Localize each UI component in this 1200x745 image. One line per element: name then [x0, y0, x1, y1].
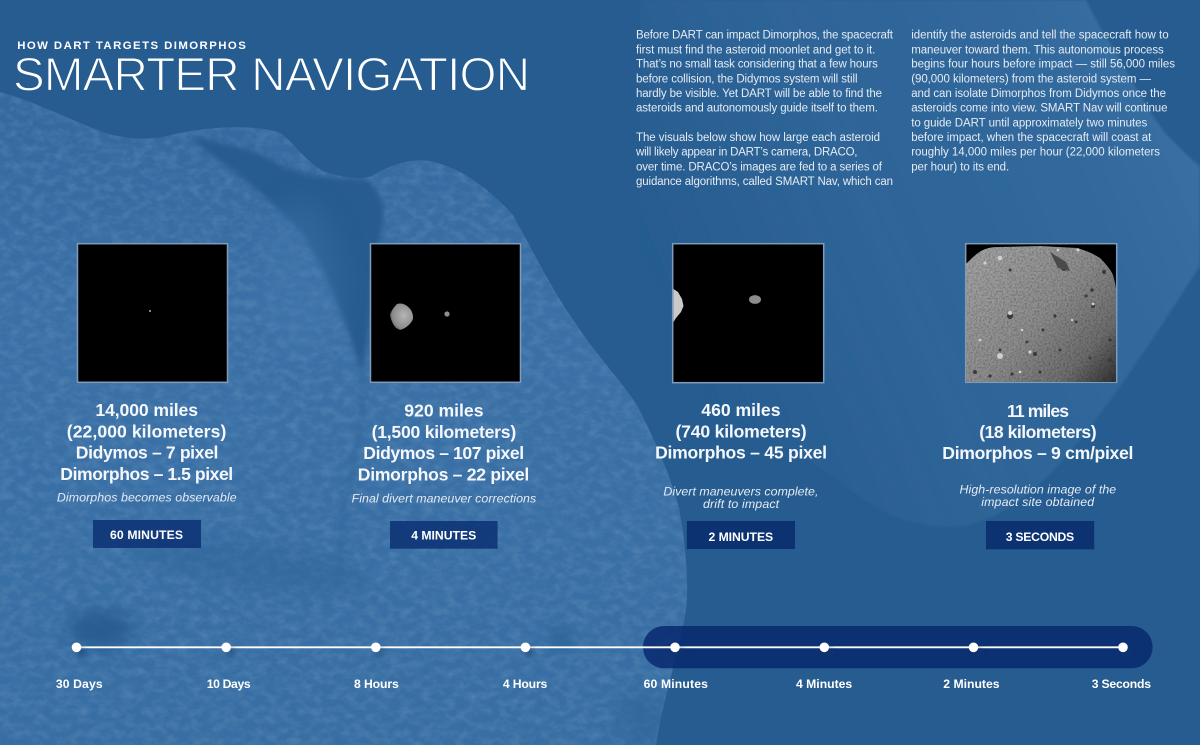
stats: 60 minutes: (22,000 kilometers) [67, 422, 226, 442]
camera image: 60 minutes [78, 244, 228, 382]
stats: 60 minutes: 14,000 miles [95, 400, 198, 420]
intro text column two: (90,000 kilometers) from the asteroid system — [911, 73, 1152, 85]
stats: 60 minutes: Didymos – 7 pixel [76, 442, 218, 462]
stats: 3 seconds: (18 kilometers) [979, 422, 1097, 442]
timeline highlight band [643, 626, 1153, 668]
caption: 2 minutes: Divert maneuvers complete, [663, 484, 818, 498]
stats: 4 minutes: Didymos – 107 pixel [363, 443, 524, 463]
intro text column one: before collision, the Didymos system will still [636, 73, 858, 85]
stats: 2 minutes: (740 kilometers) [676, 422, 807, 442]
timeline labels [56, 677, 1151, 691]
timeline labels: 4 Hours [503, 677, 548, 691]
timeline labels: 8 Hours [354, 677, 399, 691]
camera image: 4 minutes [370, 244, 520, 382]
intro text column two: per hour) to its end. [911, 161, 1009, 173]
intro text column one: will likely appear in DART’s camera, DRACO, [635, 147, 858, 159]
time badge: 3 seconds [986, 521, 1094, 549]
caption: 3 seconds: High-resolution image of the [960, 482, 1116, 496]
timeline markers [72, 642, 1128, 652]
timeline labels: 30 Days [56, 677, 103, 691]
panel: 2 minutes [655, 244, 827, 549]
panel: 3 seconds [942, 244, 1133, 549]
time badge: 4 minutes: 4 MINUTES [411, 528, 476, 542]
stats: 4 minutes: Dimorphos – 22 pixel [358, 465, 529, 485]
stats: 4 minutes [358, 401, 529, 485]
intro text column two: and can isolate Dimorphos from Didymos once the [911, 88, 1166, 100]
caption: 3 seconds [960, 482, 1116, 509]
panel: 4 minutes [352, 244, 536, 549]
timeline labels: 2 Minutes [943, 677, 1000, 691]
intro text column two: identify the asteroids and tell the spacecraft how to [911, 30, 1169, 42]
stats: 2 minutes [655, 400, 827, 462]
caption: 2 minutes: drift to impact [703, 497, 780, 511]
intro text column one: guidance algorithms, called SMART Nav, which can [636, 176, 893, 188]
intro text column two: asteroids come into view. SMART Nav will continue [911, 103, 1168, 115]
intro text column one: That’s no small task considering that a few hours [636, 59, 878, 71]
background: near asteroid [0, 90, 700, 745]
timeline [56, 626, 1153, 691]
intro text column two: maneuver toward them. This autonomous process [911, 44, 1164, 56]
panel: 60 minutes [57, 244, 237, 548]
timeline track [76, 646, 1123, 648]
timeline labels: 60 Minutes [644, 677, 708, 691]
background: distant asteroid [640, 0, 1200, 527]
intro text column two: to guide DART until approximately two minutes [911, 117, 1147, 129]
stats: 2 minutes: Dimorphos – 45 pixel [655, 442, 827, 462]
time badge: 2 minutes [687, 521, 795, 549]
intro text column one: hardly be visible. Yet DART will be able to find the [636, 88, 882, 100]
intro text column one: asteroids and autonomously guide itself to them. [636, 103, 878, 115]
intro text column one: first must find the asteroid moonlet and get to it. [636, 44, 875, 56]
stats: 3 seconds: 11 miles [1007, 401, 1069, 421]
intro text column one: The visuals below show how large each asteroid [636, 132, 880, 144]
heading kicker: HOW DART TARGETS DIMORPHOS [17, 40, 246, 52]
caption: 3 seconds: impact site obtained [981, 495, 1095, 509]
caption: 4 minutes: Final divert maneuver corrections [352, 492, 536, 506]
stats: 4 minutes: 920 miles [404, 401, 484, 421]
time badge: 4 minutes [390, 521, 498, 549]
stats: 4 minutes: (1,500 kilometers) [372, 422, 516, 442]
stats: 2 minutes: 460 miles [701, 400, 781, 420]
time badge: 60 minutes [93, 520, 201, 548]
stats: 3 seconds: Dimorphos – 9 cm/pixel [942, 443, 1133, 463]
intro text column one: over time. DRACO’s images are fed to a series of [636, 161, 883, 173]
caption: 60 minutes: Dimorphos becomes observable [57, 490, 237, 504]
time badge: 3 seconds: 3 SECONDS [1006, 530, 1074, 544]
timeline labels: 10 Days [207, 677, 251, 691]
main title: SMARTER NAVIGATION [13, 49, 530, 102]
intro text column two: roughly 14,000 miles per hour (22,000 kilometers [911, 147, 1160, 159]
stats: 3 seconds [942, 401, 1133, 463]
stats: 60 minutes [60, 400, 233, 484]
intro text column two: before impact, when the spacecraft will coast at [911, 132, 1152, 144]
intro text column one: Before DART can impact Dimorphos, the spacecraft [636, 30, 894, 42]
timeline labels: 4 Minutes [796, 677, 852, 691]
time badge: 60 minutes: 60 MINUTES [110, 528, 183, 542]
stats: 60 minutes: Dimorphos – 1.5 pixel [60, 464, 233, 484]
timeline marker shadows [77, 648, 1132, 656]
intro text column two: begins four hours before impact — still 56,000 miles [911, 59, 1175, 71]
intro text column two [911, 30, 1175, 173]
camera image: 3 seconds [966, 244, 1117, 383]
time badge: 2 minutes: 2 MINUTES [708, 530, 773, 544]
timeline labels: 3 Seconds [1092, 677, 1151, 691]
caption: 2 minutes [663, 484, 818, 511]
intro text column one [635, 30, 894, 188]
camera image: 2 minutes [673, 244, 824, 383]
